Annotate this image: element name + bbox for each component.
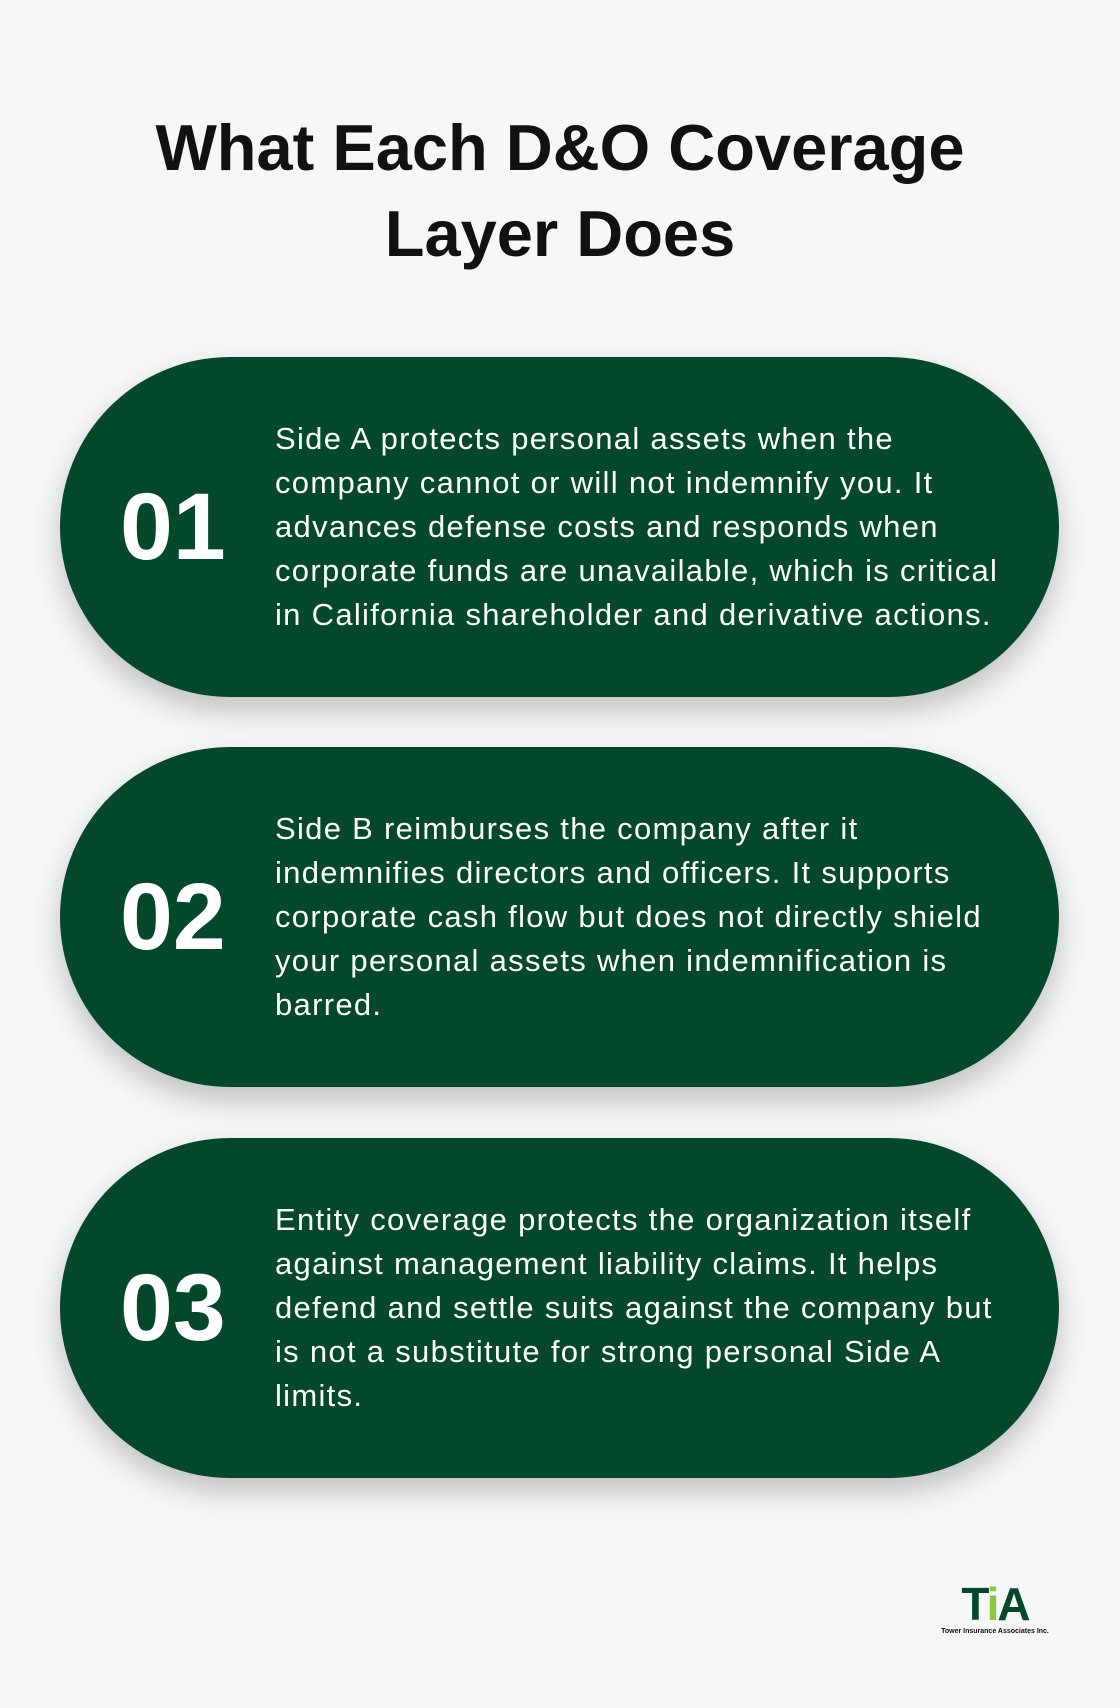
text: side A: corporate funds are unavailable, which is critical: [275, 553, 998, 588]
panel: side B: [60, 747, 1059, 1087]
text: entity coverage: against management liability claims. It helps: [275, 1246, 938, 1281]
text: side B: [275, 811, 982, 1022]
logo: TiA: [961, 1578, 1029, 1630]
text: side B: indemnifies directors and officers. It supports: [275, 855, 951, 890]
logo: Tower Insurance Associates Inc.: [941, 1628, 1049, 1635]
text: side A: company cannot or will not indemnify you. It: [275, 465, 934, 500]
number 03: 03: [120, 1254, 226, 1360]
title: Layer Does: [385, 197, 735, 270]
title: [155, 111, 965, 270]
text: entity coverage: limits.: [275, 1378, 363, 1413]
title: What Each D&O Coverage: [155, 111, 965, 184]
text: side A: in California shareholder and derivative actions.: [275, 597, 992, 632]
text: entity coverage: is not a substitute for strong personal Side A: [275, 1334, 941, 1369]
text: entity coverage: Entity coverage protects the organization itself: [275, 1202, 972, 1237]
text: side A: Side A protects personal assets when the: [275, 421, 894, 456]
text: side A: advances defense costs and responds when: [275, 509, 939, 544]
text: entity coverage: defend and settle suits against the company but: [275, 1290, 993, 1325]
text: side B: Side B reimburses the company after it: [275, 811, 859, 846]
panel: entity coverage: [60, 1138, 1059, 1478]
logo: [941, 1578, 1049, 1635]
text: entity coverage: [275, 1202, 993, 1413]
panel: side A: [60, 357, 1059, 697]
number 02: 02: [120, 864, 226, 970]
text: side B: corporate cash flow but does not directly shield: [275, 899, 982, 934]
text: side B: barred.: [275, 987, 382, 1022]
text: side A: [275, 421, 998, 632]
number 01: 01: [120, 474, 226, 580]
text: side B: your personal assets when indemnification is: [275, 943, 947, 978]
